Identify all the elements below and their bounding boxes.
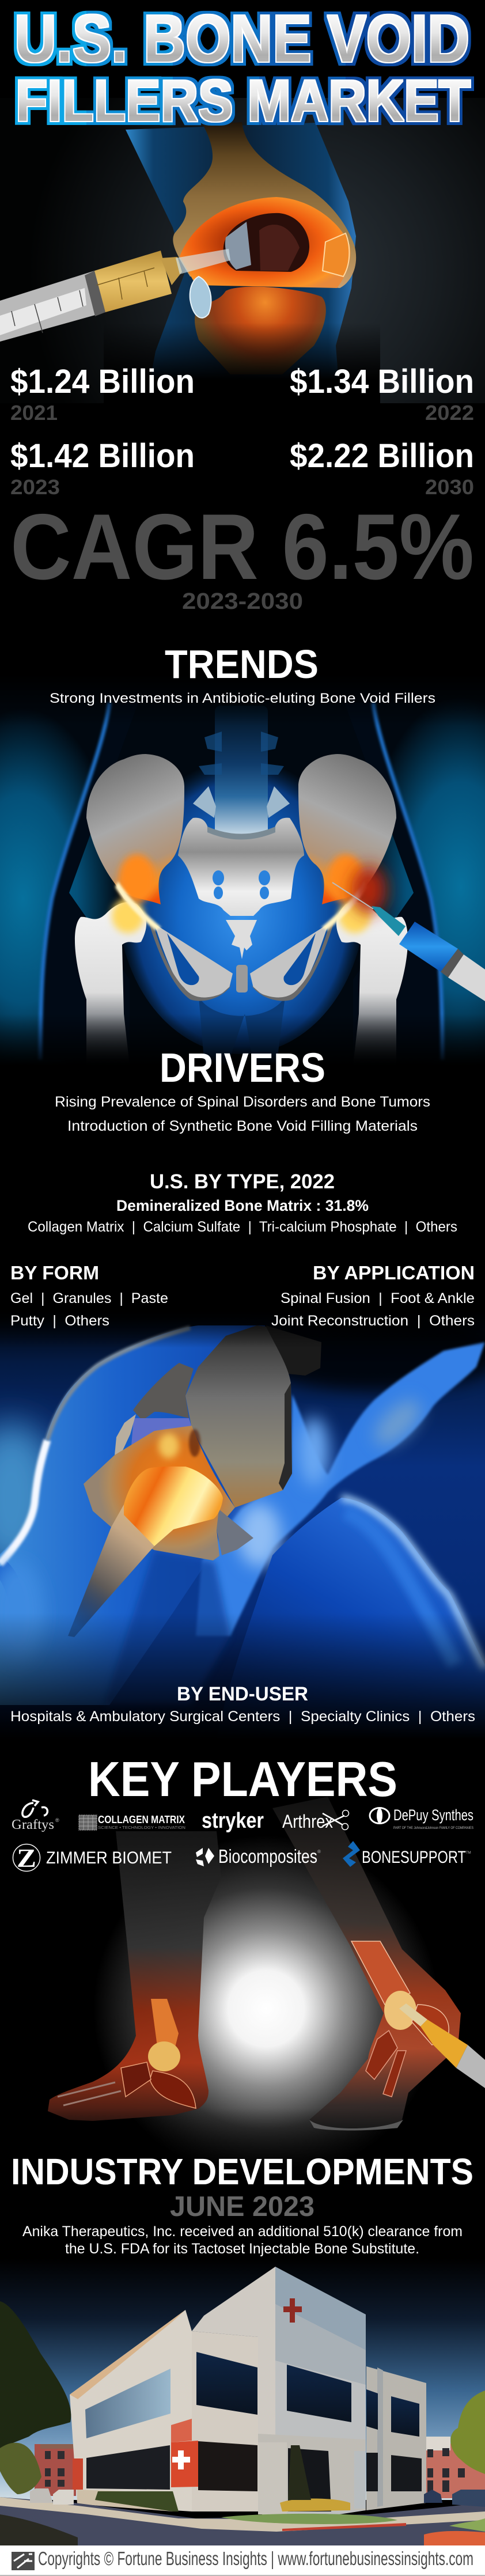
red panels: [171, 2419, 192, 2442]
logo: Arthrex: Arthrex: [282, 1811, 333, 1832]
back buildings: [35, 2437, 485, 2498]
title: [14, 1, 471, 134]
annex: [366, 2366, 426, 2510]
illustration: pelvis with syringe: [0, 674, 485, 1089]
stat: 2021: $1.24 Billion: [10, 363, 195, 400]
illustration: knee with syringe: [0, 98, 485, 409]
logo: Biocomposites: Biocomposites: [218, 1846, 317, 1867]
logo: Collagen Matrix: SCIENCE • TECHNOLOGY • INNOVATION: [98, 1826, 185, 1830]
by type: U.S. BY TYPE, 2022: [150, 1170, 335, 1193]
yellow syringe: [399, 2003, 485, 2088]
half pelvis right: [250, 754, 408, 1066]
stat: 2023: [10, 437, 195, 499]
left wing: [70, 2310, 192, 2511]
by application: Spinal Fusion | Foot & Ankle: [281, 1290, 475, 1306]
ground: [0, 2497, 485, 2545]
by form: [10, 1262, 168, 1329]
drivers block: Rising Prevalence of Spinal Disorders and Bone Tumors: [55, 1094, 430, 1110]
stat: 2022: [290, 363, 474, 425]
industry developments block: the U.S. FDA for its Tactoset Injectable Bone Substitute.: [65, 2241, 419, 2257]
by type: Collagen Matrix | Calcium Sulfate | Tri-calcium Phosphate | Others: [28, 1219, 457, 1235]
cars: [30, 2488, 53, 2503]
logo: Zimmer Biomet: Z: [17, 1843, 36, 1873]
by end-user: BY END-USER: [177, 1683, 308, 1705]
stat: 2030: 2030: [425, 475, 474, 499]
front wing: [192, 2331, 258, 2511]
stat: 2030: [290, 437, 474, 499]
key players heading: KEY PLAYERS: [88, 1752, 397, 1807]
spine: [193, 706, 290, 835]
shaded gap between shaft and thigh: [104, 1550, 230, 1705]
logo: Zimmer Biomet: [13, 1843, 172, 1873]
drivers block: [55, 1045, 430, 1134]
logo: DePuy Synthes: PART OF THE Johnson&Johnson FAMILY OF COMPANIES: [393, 1827, 473, 1830]
illustration: hospital building: [0, 2258, 485, 2545]
blue syringe: [332, 882, 485, 1001]
half pelvis left: [75, 754, 233, 1066]
socket and femur head: [68, 1426, 253, 1637]
drivers block: Introduction of Synthetic Bone Void Filling Materials: [67, 1118, 418, 1134]
by application: Joint Reconstruction | Others: [271, 1313, 475, 1329]
stat: 2023: $1.42 Billion: [10, 437, 195, 475]
tower: [275, 2267, 366, 2524]
right body band: [196, 1342, 485, 1636]
logo: Graftys: [12, 1800, 59, 1832]
logo: Collagen Matrix: [79, 1814, 185, 1830]
stat: 2021: [10, 363, 195, 425]
logo: Zimmer Biomet: ZIMMER BIOMET: [46, 1848, 172, 1867]
logo: Bonesupport: [343, 1841, 471, 1867]
stat: 2022: $1.34 Billion: [290, 363, 474, 400]
stat: 2023: 2023: [10, 475, 60, 499]
trends heading: TRENDS: [165, 642, 319, 687]
industry developments block: [11, 2151, 473, 2257]
logo: DePuy Synthes: [370, 1806, 473, 1830]
right thigh: [213, 1498, 485, 1763]
black band behind drivers: [0, 1066, 485, 1308]
stat: 2021: 2021: [10, 401, 58, 425]
logo: Stryker: stryker: [202, 1809, 264, 1833]
CAGR: 2023-2030: [182, 589, 303, 614]
by type: [28, 1170, 457, 1235]
by end-user: Hospitals & Ambulatory Surgical Centers | Specialty Clinics | Others: [10, 1709, 475, 1725]
industry developments block: JUNE 2023: [170, 2191, 315, 2222]
drivers block: DRIVERS: [160, 1045, 325, 1091]
illustration: feet and ankle glow: [0, 1757, 485, 2183]
left leg: [48, 1831, 221, 2121]
by form: Gel | Granules | Paste: [10, 1290, 168, 1306]
illustration: hip joint: [0, 1308, 485, 1763]
footer: [0, 2545, 485, 2576]
by application: [271, 1262, 475, 1329]
stat: 2022: 2022: [425, 401, 474, 425]
logo: Graftys: Graftys: [12, 1817, 54, 1832]
by application: BY APPLICATION: [313, 1262, 475, 1283]
stat: 2030: $2.22 Billion: [290, 437, 474, 475]
industry developments block: Anika Therapeutics, Inc. received an additional 510(k) clearance from: [22, 2223, 463, 2240]
logo: Collagen Matrix: COLLAGEN MATRIX: [98, 1814, 185, 1825]
trees: [0, 2301, 71, 2448]
logo: Biocomposites: ®: [317, 1849, 321, 1854]
by form: Putty | Others: [10, 1313, 109, 1329]
logo: Bonesupport: TM: [466, 1851, 471, 1855]
trends text: Strong Investments in Antibiotic-eluting Bone Void Fillers: [50, 691, 435, 706]
syringe: [0, 249, 230, 342]
logo: Fortune Business Insights: [12, 2552, 35, 2570]
right leg: [272, 1797, 461, 2128]
pelvis bone: [115, 1325, 321, 1507]
by type: Demineralized Bone Matrix : 31.8%: [116, 1197, 369, 1214]
by end-user: [10, 1683, 475, 1725]
by form: BY FORM: [10, 1262, 99, 1283]
logo: Graftys: ®: [55, 1817, 59, 1823]
sacrum: [178, 818, 304, 959]
